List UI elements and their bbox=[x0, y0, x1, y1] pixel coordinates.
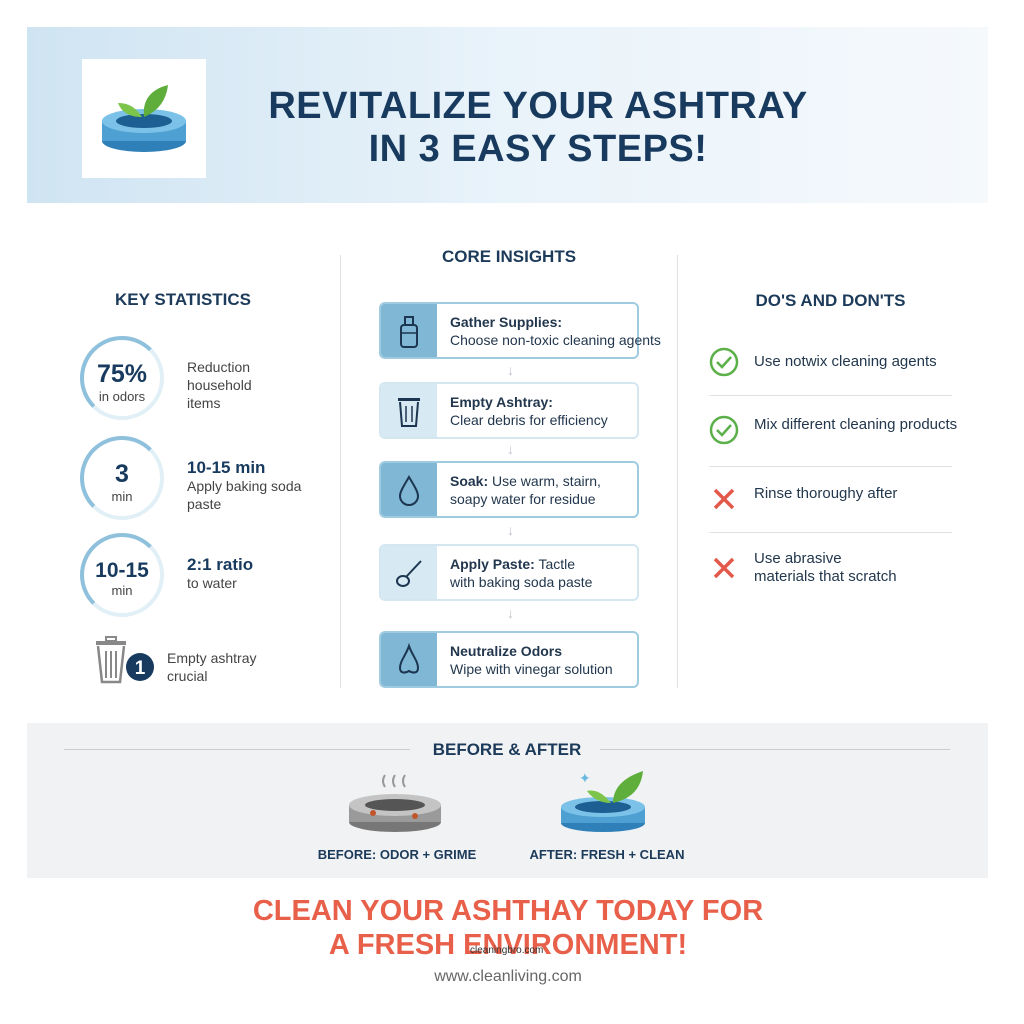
text: ↓ bbox=[507, 522, 514, 538]
do 2 bbox=[710, 416, 738, 444]
caption: after: AFTER: FRESH + CLEAN bbox=[530, 847, 684, 862]
call to action: A FRESH ENVIRONMENT! bbox=[329, 929, 687, 961]
step 3 card: Soak: Use warm, stairn, bbox=[450, 473, 601, 489]
text: cleaningbro.com bbox=[470, 945, 543, 956]
stat 4: empty ashtray bbox=[96, 636, 256, 684]
step 1 card: Gather Supplies: bbox=[450, 314, 562, 330]
step 1 card bbox=[379, 302, 639, 359]
stat 2: paste bbox=[187, 496, 221, 512]
stat 3 bbox=[80, 533, 253, 617]
text: Use notwix cleaning agents bbox=[754, 353, 937, 370]
stat 4: empty ashtray: 1 bbox=[135, 658, 146, 679]
stat 1: items bbox=[187, 395, 220, 411]
step 3 card: soapy water for residue bbox=[450, 491, 596, 507]
caption: before: BEFORE: ODOR + GRIME bbox=[318, 847, 476, 862]
do 1 bbox=[710, 348, 738, 376]
panel: before & after bbox=[27, 723, 988, 878]
stat 2: min bbox=[112, 489, 132, 504]
step 4 card: with baking soda paste bbox=[450, 574, 592, 590]
heading: core insights: CORE INSIGHTS bbox=[442, 247, 576, 266]
step 5 card: Wipe with vinegar solution bbox=[450, 661, 613, 677]
text: materials that scratch bbox=[754, 568, 897, 585]
stat 1 bbox=[80, 336, 252, 420]
dont 1 bbox=[714, 488, 734, 510]
text: Rinse thoroughy after bbox=[754, 485, 897, 502]
heading: before & after: BEFORE & AFTER bbox=[433, 740, 581, 759]
stat 3: min bbox=[112, 583, 132, 598]
step 2 card: Empty Ashtray: bbox=[450, 394, 553, 410]
call to action bbox=[253, 895, 763, 961]
stat 3: to water bbox=[187, 575, 237, 591]
stat 1: Reduction bbox=[187, 359, 250, 375]
stat 1: household bbox=[187, 377, 252, 393]
step 4 card bbox=[379, 544, 639, 601]
stat 2: Apply baking soda bbox=[187, 478, 301, 494]
stat 3: 2:1 ratio bbox=[187, 555, 253, 574]
header banner bbox=[27, 27, 988, 203]
icon: dirty ashtray bbox=[349, 774, 441, 832]
step 2 card: Clear debris for efficiency bbox=[450, 412, 608, 428]
heading: do's and don'ts: DO'S AND DON'TS bbox=[755, 291, 906, 310]
footer url: www.cleanliving.com bbox=[434, 968, 582, 985]
stat 4: empty ashtray: crucial bbox=[167, 668, 207, 684]
text: Mix different cleaning products bbox=[754, 416, 957, 433]
title: REVITALIZE YOUR ASHTRAY bbox=[268, 85, 808, 127]
step 5 card: Neutralize Odors bbox=[450, 643, 562, 659]
stat 3: 10-15 bbox=[95, 559, 149, 582]
icon: clean ashtray bbox=[561, 770, 645, 832]
step 2 card bbox=[379, 382, 639, 439]
stat 2 bbox=[80, 436, 302, 520]
stat 1: in odors bbox=[99, 389, 145, 404]
dont 2 bbox=[714, 558, 734, 578]
title: IN 3 EASY STEPS! bbox=[369, 128, 707, 170]
logo: clean ashtray bbox=[82, 59, 206, 178]
stat 4: empty ashtray: Empty ashtray bbox=[167, 650, 256, 666]
step 1 card: Choose non-toxic cleaning agents bbox=[450, 332, 661, 348]
text: ↓ bbox=[507, 362, 514, 378]
icon: clean ashtray: ✦ bbox=[579, 770, 591, 786]
step 5 card bbox=[379, 631, 639, 688]
text: Use abrasive bbox=[754, 550, 842, 567]
text: ↓ bbox=[507, 605, 514, 621]
heading: key statistics: KEY STATISTICS bbox=[115, 290, 251, 309]
stat 2: 10-15 min bbox=[187, 458, 265, 477]
step 4 card: Apply Paste: Tactle bbox=[450, 556, 575, 572]
step 3 card bbox=[379, 461, 639, 518]
stat 1: 75% bbox=[97, 360, 147, 388]
title bbox=[268, 85, 808, 170]
stat 2: 3 bbox=[115, 460, 129, 488]
text: ↓ bbox=[507, 441, 514, 457]
call to action: CLEAN YOUR ASHTHAY TODAY FOR bbox=[253, 895, 763, 927]
